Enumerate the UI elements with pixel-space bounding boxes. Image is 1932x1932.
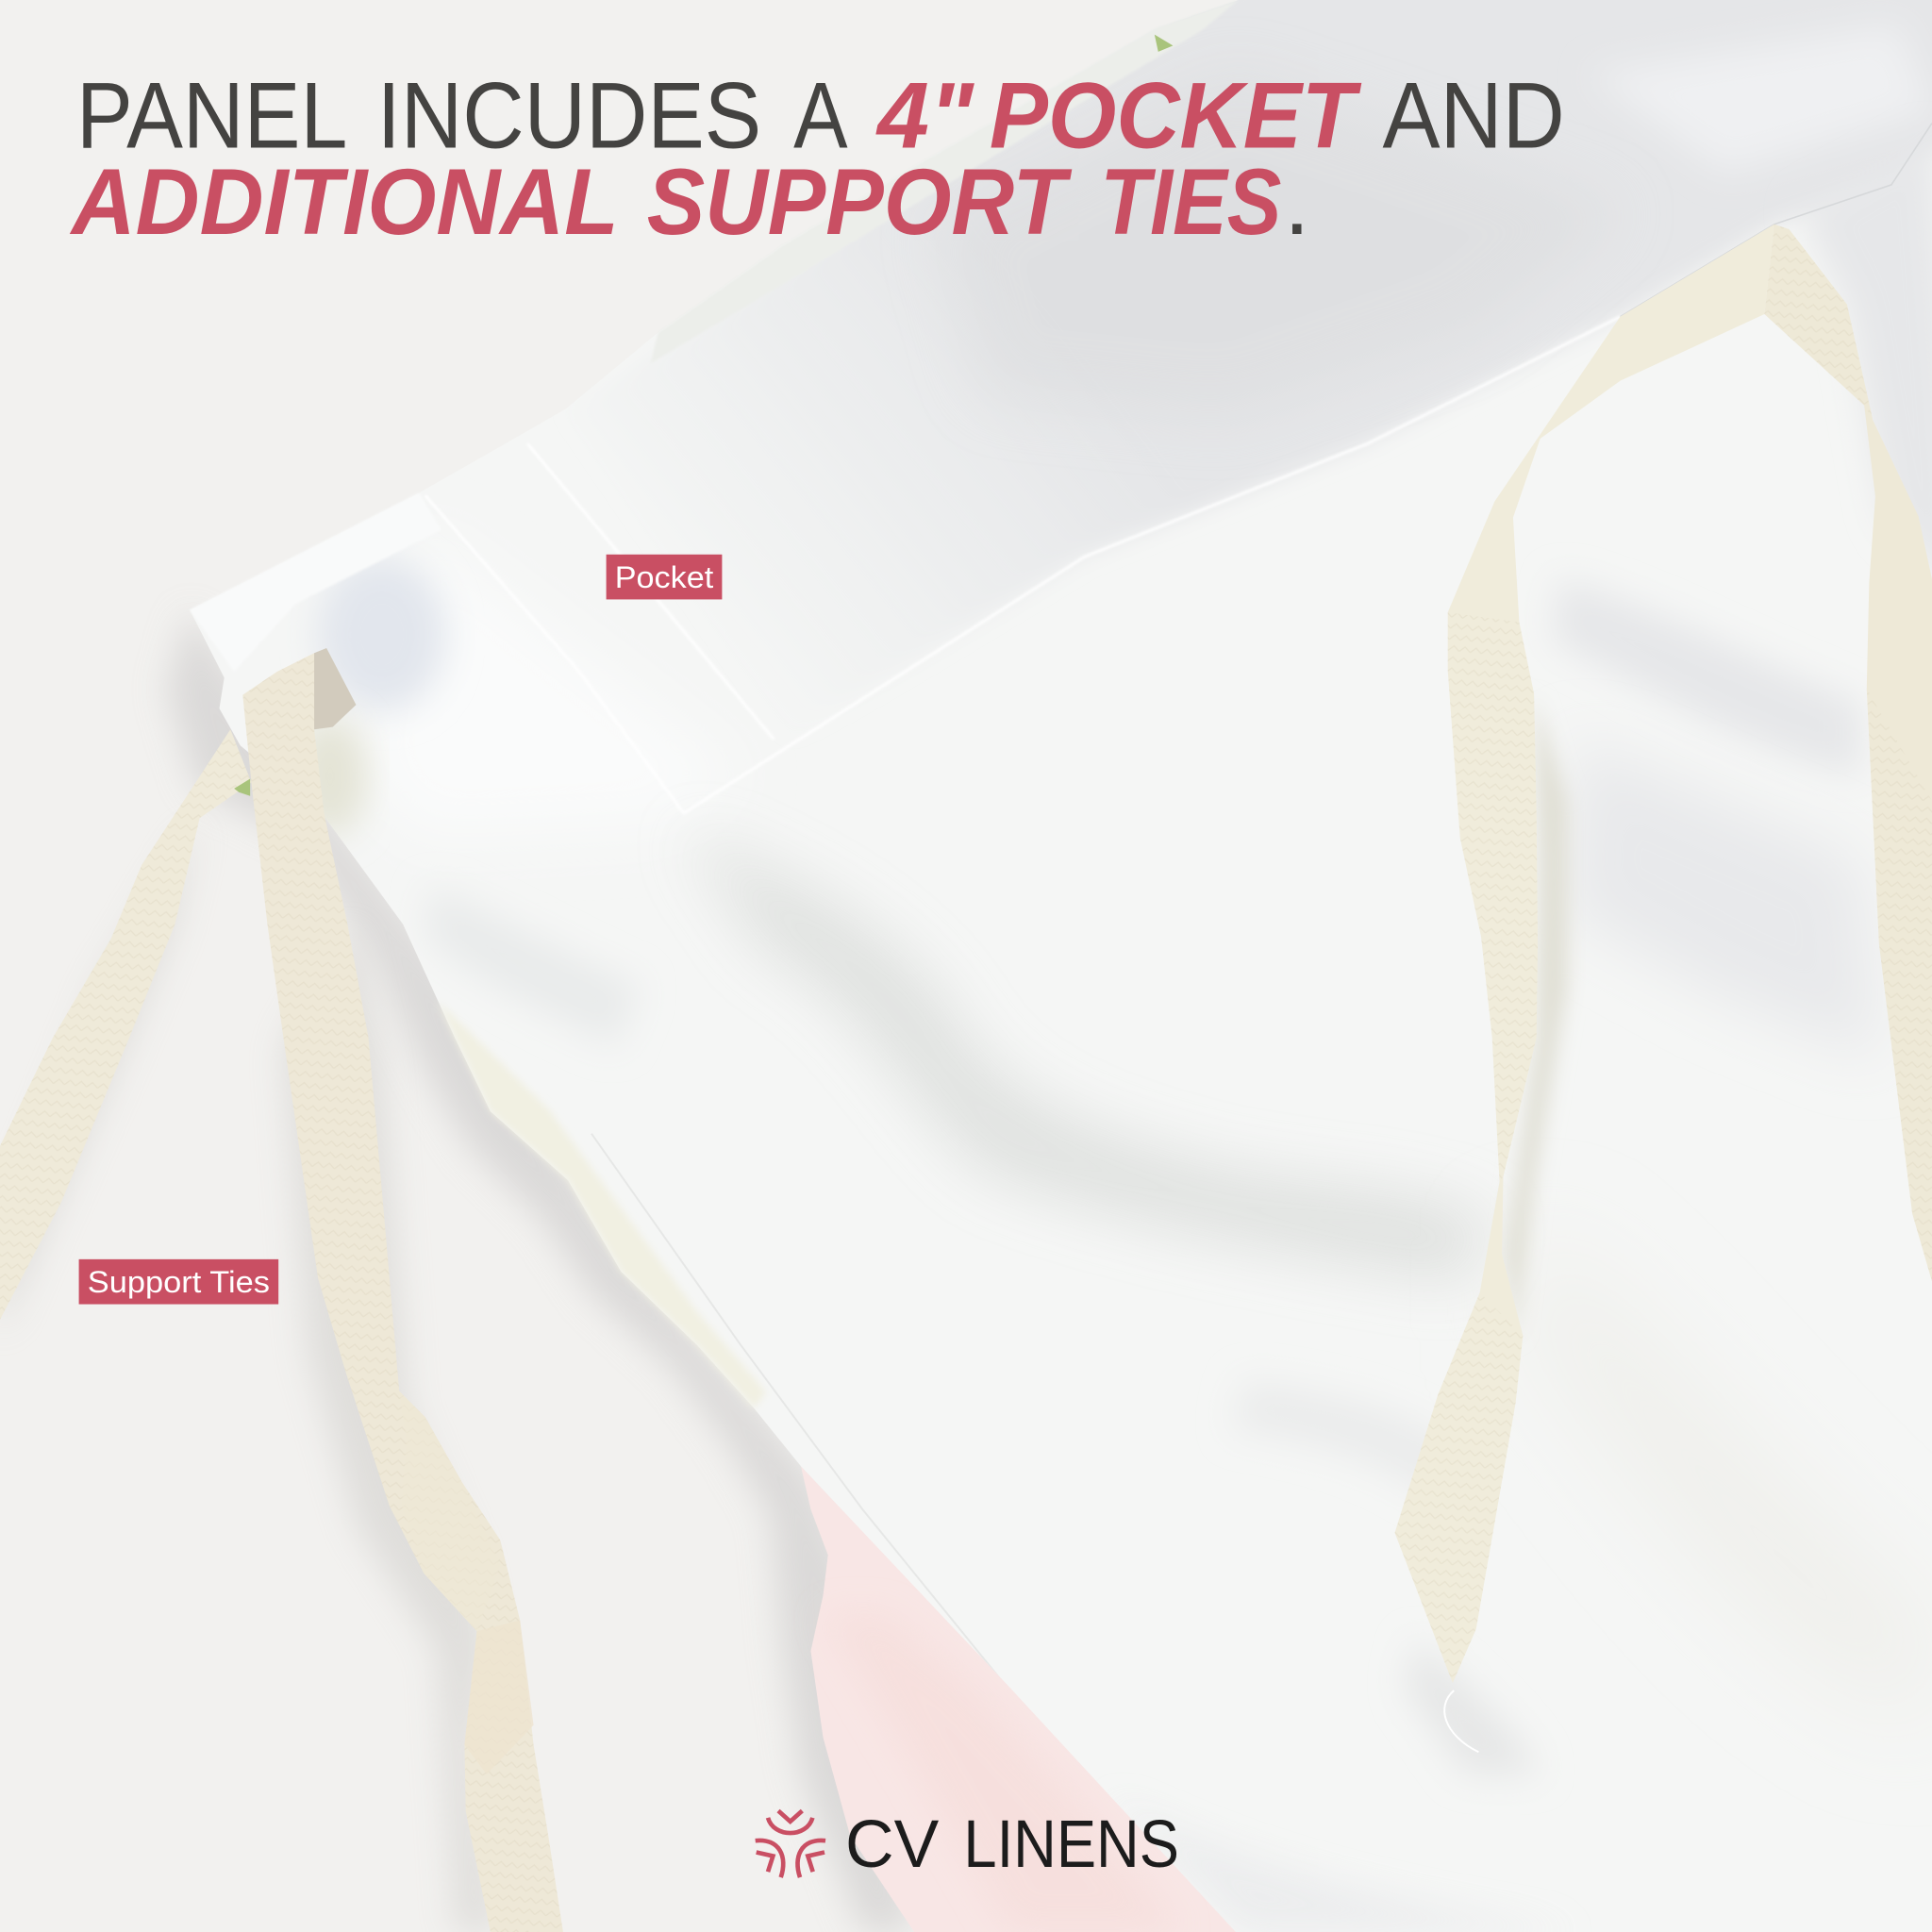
- label: support ties: Support Ties: [88, 1264, 270, 1299]
- left tie: [0, 729, 251, 1320]
- waistband shadow near tie: [318, 558, 446, 711]
- shading at bottom: [1213, 1868, 1341, 1915]
- pocket seams: [936, 316, 1620, 651]
- crease shadows: [684, 832, 1491, 1281]
- title: [69, 64, 1565, 255]
- label: pocket: [607, 555, 722, 599]
- bright area left of pocket: [358, 530, 740, 838]
- pink underlayer: [801, 1466, 1236, 1932]
- grey fabric right of strap: [1813, 170, 1932, 567]
- center tie: [242, 648, 563, 1932]
- title: 4": [875, 64, 975, 169]
- apron cast shadow: [166, 610, 912, 1932]
- title: .: [1284, 150, 1310, 255]
- tie shadows: [0, 818, 499, 1932]
- title: SUPPORT: [647, 150, 1073, 255]
- shadow beside right tie: [1506, 693, 1567, 1343]
- title: A: [793, 64, 848, 169]
- title: ADDITIONAL: [69, 150, 619, 255]
- logo: LINENS: [963, 1807, 1179, 1882]
- icon: CV Linens mark: [756, 1810, 825, 1877]
- grey streaks inside loop: [1558, 591, 1858, 766]
- label: support ties: [79, 1259, 278, 1305]
- right tie loop: [1395, 225, 1932, 1752]
- label: pocket: Pocket: [615, 559, 713, 594]
- wordmark: CV: [845, 1807, 939, 1882]
- title: TIES: [1100, 150, 1281, 255]
- cream back layer strip: [438, 1001, 766, 1408]
- title: POCKET: [990, 64, 1362, 169]
- upper grey fabric: [749, 0, 1932, 600]
- title: INCUDES: [377, 64, 761, 169]
- logo: [756, 1807, 1179, 1882]
- ruffle edge: [651, 0, 1239, 363]
- title: AND: [1382, 64, 1565, 169]
- title: PANEL: [76, 64, 347, 169]
